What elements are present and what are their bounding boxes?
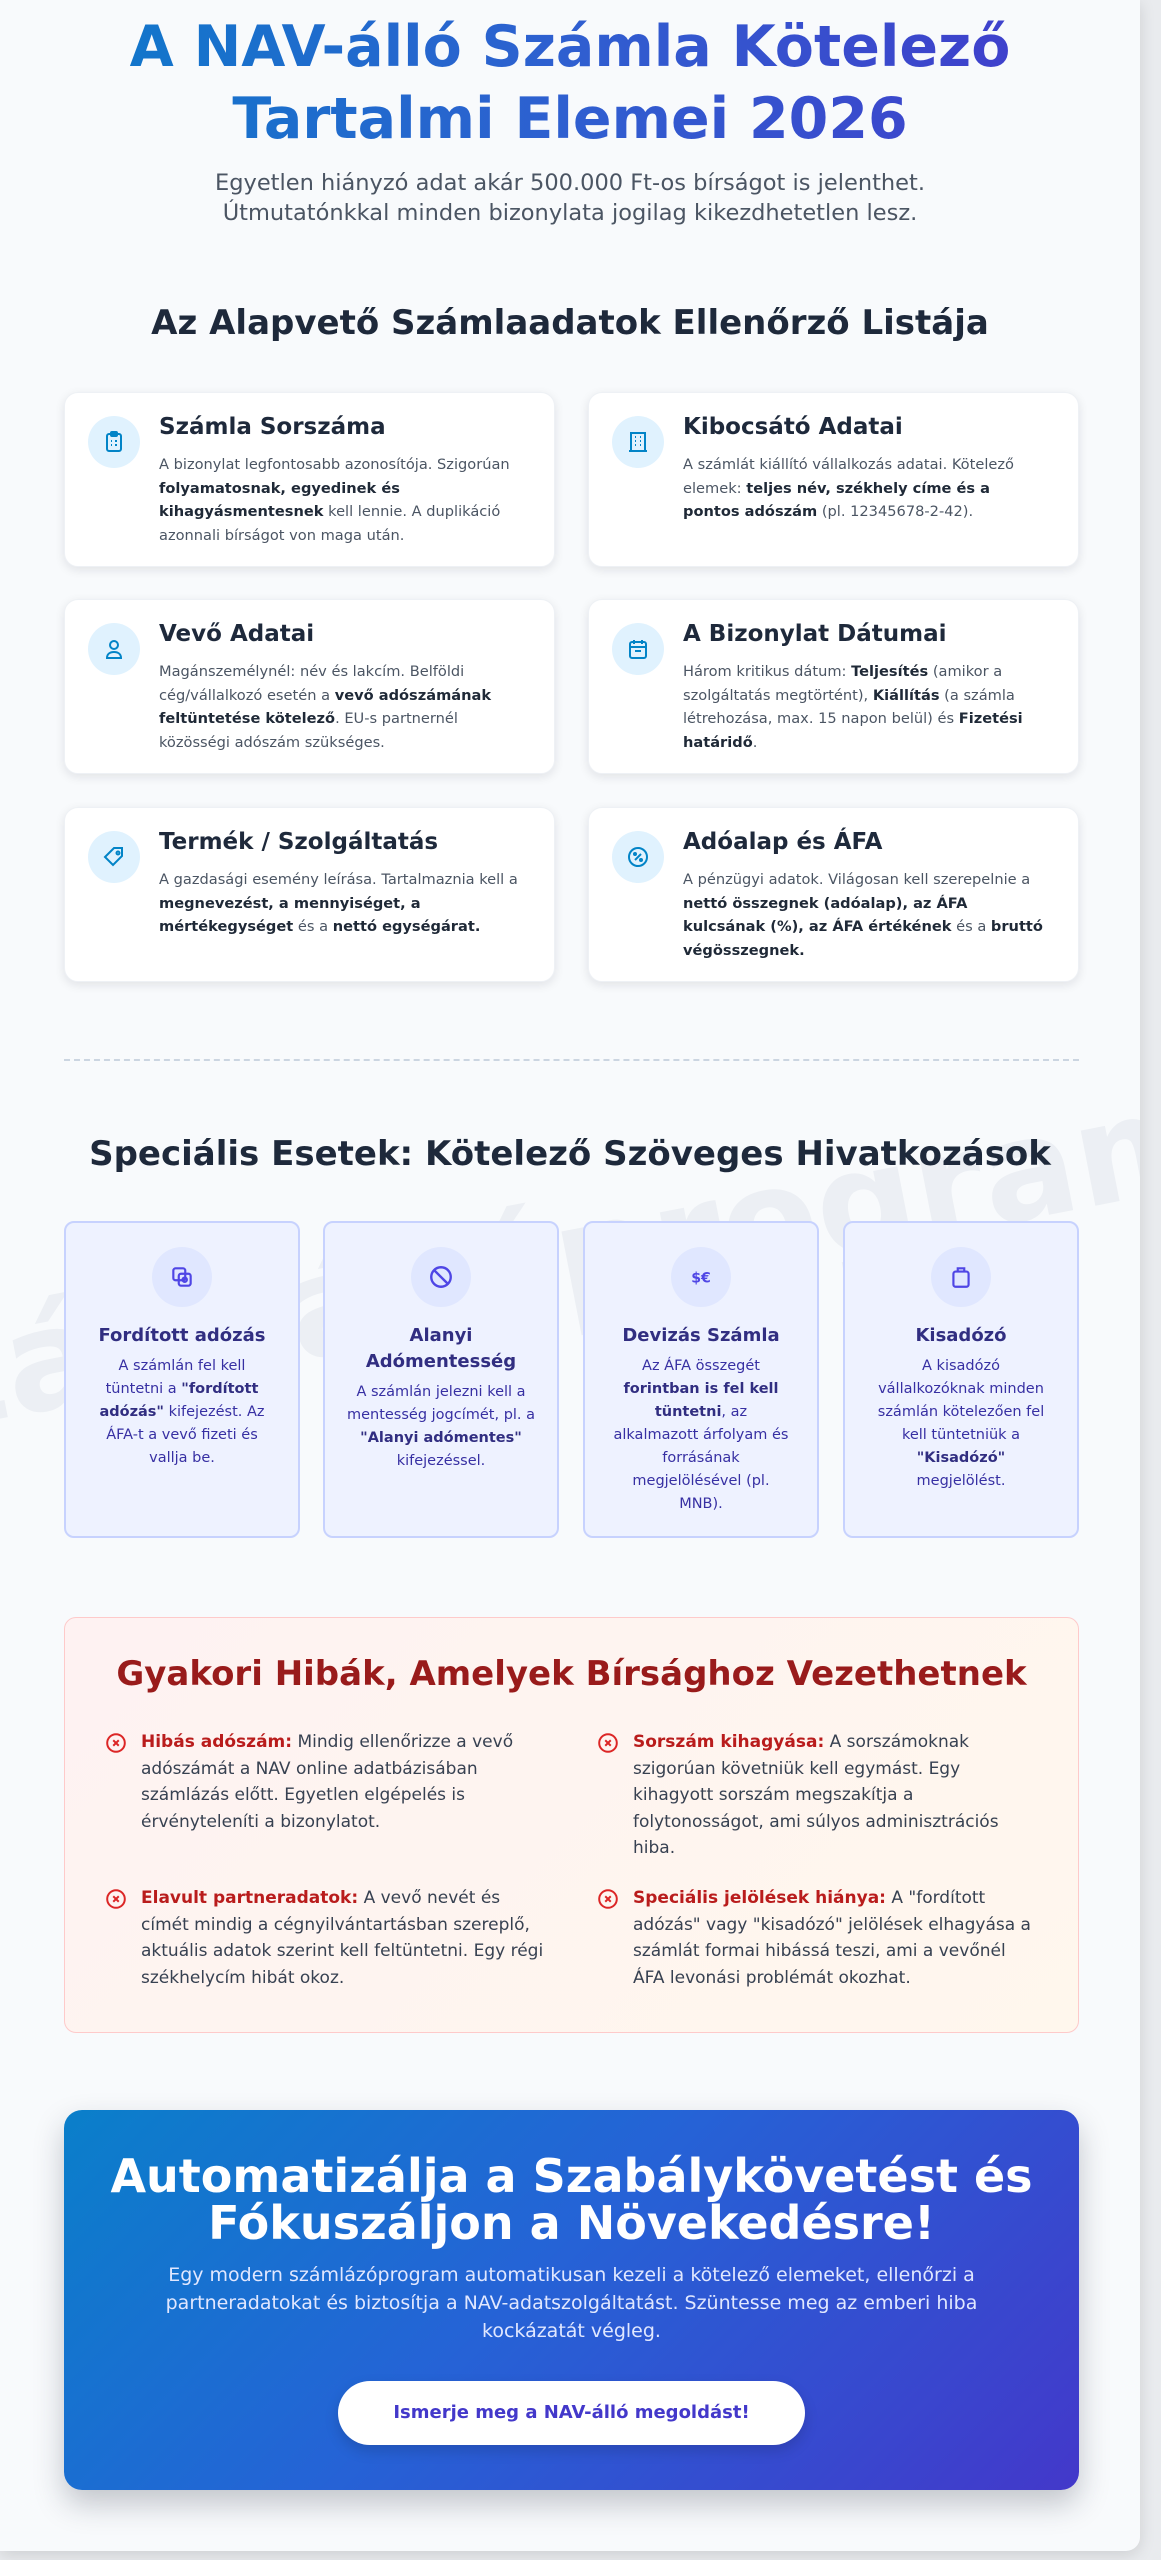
card: Adóalap és ÁFA: Adóalap és ÁFA	[683, 829, 882, 855]
title	[0, 11, 1140, 155]
icon: clipboard	[88, 416, 140, 468]
icon: building	[612, 416, 664, 468]
special card: Kisadózó: A kisadózó vállalkozóknak minden számlán kötelezően fel kell tüntetniük a "Kisadózó" megjelölést.	[878, 1358, 1044, 1489]
special card: Kisadózó	[843, 1221, 1079, 1538]
icon: user	[88, 623, 140, 675]
heading: checklist: Az Alapvető Számlaadatok Ellenőrző Listája	[151, 303, 989, 343]
card: A Bizonylat Dátumai	[588, 599, 1079, 774]
heading: errors: Gyakori Hibák, Amelyek Bírsághoz Vezethetnek	[116, 1654, 1027, 1694]
panel: common errors	[64, 1617, 1079, 2033]
special card: Alanyi Adómentesség: A számlán jelezni kell a mentesség jogcímét, pl. a "Alanyi adómentes" kifejezéssel.	[347, 1384, 535, 1469]
special card: Devizás Számla: Az ÁFA összegét forintban is fel kell tüntetni, az alkalmazott árfolyam és forrásának megjelölésével (pl. MNB).	[614, 1358, 788, 1512]
title: A NAV-álló Számla Kötelező	[130, 14, 1010, 80]
subtitle	[215, 170, 925, 226]
title: Tartalmi Elemei 2026	[232, 86, 908, 152]
special card: Devizás Számla: Devizás Számla	[622, 1325, 780, 1346]
error: Elavult partneradatok: Elavult partneradatok: A vevő nevét és címét mindig a cégnyilvántartásban szereplő, aktuális adatok szerint kell feltüntetni. Egy régi székhelycím hibát okoz.	[141, 1888, 543, 1988]
icon: tag	[88, 831, 140, 883]
CTA heading	[110, 2149, 1033, 2250]
icon: currency	[671, 1247, 731, 1307]
card: Vevő Adatai: Vevő Adatai	[159, 621, 314, 647]
card: Számla Sorszáma: A bizonylat legfontosabb azonosítója. Szigorúan folyamatosnak, egyedinek és kihagyásmentesnek kell lennie. A duplikáció azonnali bírságot von maga után.	[159, 456, 510, 544]
card: A Bizonylat Dátumai: Három kritikus dátum: Teljesítés (amikor a szolgáltatás megtörtént), Kiállítás (a számla létrehozása, max. 15 napon belül) és Fizetési határidő.	[683, 663, 1023, 750]
special card: Devizás Számla	[583, 1221, 819, 1538]
CTA heading: Fókuszáljon a Növekedésre!	[208, 2196, 935, 2250]
icon: calendar	[612, 623, 664, 675]
special card: Fordított adózás: Fordított adózás	[98, 1325, 266, 1346]
error: Speciális jelölések hiánya: Speciális jelölések hiánya: A "fordított adózás" vagy "kisadózó" jelölések elhagyása a számlát formai hibássá teszi, ami a vevőnél ÁFA levonási problémát okozhat.	[633, 1888, 1031, 1988]
card: Adóalap és ÁFA	[588, 807, 1079, 982]
card: Termék / Szolgáltatás: A gazdasági esemény leírása. Tartalmaznia kell a megnevezést, a mennyiséget, a mértékegységet és a nettó egységárat.	[159, 871, 518, 935]
card: Kibocsátó Adatai: Kibocsátó Adatai	[683, 414, 903, 440]
CTA button: Ismerje meg a NAV-álló megoldást!	[393, 2402, 750, 2423]
special card: Fordított adózás: A számlán fel kell tüntetni a "fordított adózás" kifejezést. Az ÁFA-t a vevő fizeti és vallja be.	[99, 1358, 265, 1466]
card: Termék / Szolgáltatás	[64, 807, 555, 982]
card: Adóalap és ÁFA: A pénzügyi adatok. Világosan kell szerepelnie a nettó összegnek (adóalap), az ÁFA kulcsának (%), az ÁFA értékének és a bruttó végösszegnek.	[683, 871, 1043, 958]
card: Kibocsátó Adatai: A számlát kiállító vállalkozás adatai. Kötelező elemek: teljes név, székhely címe és a pontos adószám (pl. 12345678-2-42).	[683, 456, 1014, 520]
card: Termék / Szolgáltatás: Termék / Szolgáltatás	[159, 829, 438, 855]
icon: currency: $€	[691, 1270, 711, 1286]
error: Sorszám kihagyása: Sorszám kihagyása: A sorszámoknak szigorúan követniük kell egymást. Egy kihagyott sorszám megszakítja a folytonosságot, ami súlyos adminisztrációs hiba.	[633, 1732, 999, 1858]
subtitle: Egyetlen hiányzó adat akár 500.000 Ft-os bírságot is jelenthet.	[215, 170, 925, 196]
icon: percent	[612, 831, 664, 883]
card: Kibocsátó Adatai	[588, 392, 1079, 567]
CTA button	[338, 2381, 805, 2445]
CTA heading: Automatizálja a Szabálykövetést és	[110, 2149, 1033, 2203]
card: A Bizonylat Dátumai: A Bizonylat Dátumai	[683, 621, 947, 647]
card: Vevő Adatai: Magánszemélynél: név és lakcím. Belföldi cég/vállalkozó esetén a vevő adószámának feltüntetése kötelező. EU-s partnernél közösségi adószám szükséges.	[159, 663, 491, 750]
panel: CTA	[64, 2110, 1079, 2490]
special card: Alanyi Adómentesség: Alanyi Adómentesség	[366, 1325, 516, 1372]
icon: exchange	[152, 1247, 212, 1307]
card: Számla Sorszáma: Számla Sorszáma	[159, 414, 386, 440]
heading: special cases: Speciális Esetek: Kötelező Szöveges Hivatkozások	[89, 1134, 1051, 1174]
special card: Kisadózó: Kisadózó	[915, 1325, 1007, 1346]
card: Számla Sorszáma	[64, 392, 555, 567]
subtitle: Útmutatónkkal minden bizonylata jogilag kikezdhetetlen lesz.	[223, 200, 917, 226]
card: Vevő Adatai	[64, 599, 555, 774]
icon: ban	[411, 1247, 471, 1307]
special card: Alanyi Adómentesség	[323, 1221, 559, 1538]
special card: Fordított adózás	[64, 1221, 300, 1538]
CTA text: Egy modern számlázóprogram automatikusan kezeli a kötelező elemeket, ellenőrzi a partneradatokat és biztosítja a NAV-adatszolgáltatást. Szüntesse meg az emberi hiba kockázatát végleg.	[166, 2264, 977, 2342]
error: Hibás adószám: Hibás adószám: Mindig ellenőrizze a vevő adószámát a NAV online adatbázisában számlázás előtt. Egyetlen elgépelés is érvényteleníti a bizonylatot.	[141, 1732, 513, 1832]
icon: briefcase	[931, 1247, 991, 1307]
